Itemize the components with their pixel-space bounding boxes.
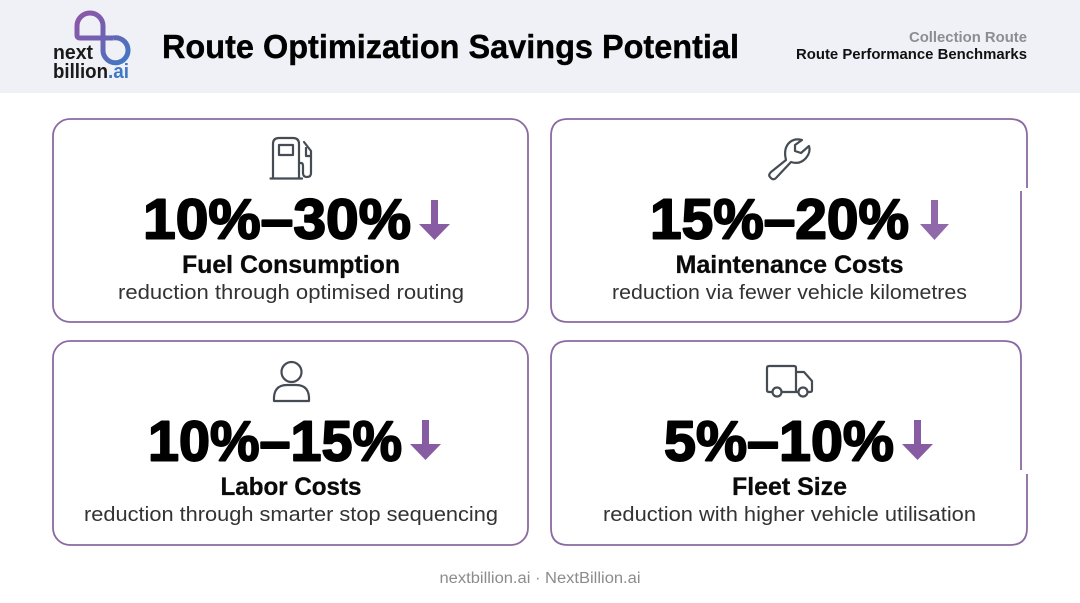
value: 10%–15%: 10%–15%	[148, 410, 402, 474]
value: 10%–30%: 10%–30%	[143, 188, 411, 252]
header band	[0, 0, 1080, 93]
logo: next	[53, 42, 93, 64]
title: Route Optimization Savings Potential	[162, 28, 739, 65]
heading: maintenance costs: Maintenance Costs	[676, 251, 904, 279]
footer: nextbillion.ai · NextBillion.ai	[440, 570, 640, 587]
arrow: down	[902, 420, 933, 460]
arrow: down	[410, 420, 441, 460]
icon: truck	[767, 366, 812, 396]
logo: billion	[53, 61, 108, 83]
icon: fuel pump	[270, 138, 311, 178]
icon: person	[274, 362, 309, 401]
arrow: down	[920, 200, 949, 240]
icon: wrench	[769, 139, 810, 179]
description: reduction with higher vehicle utilisation	[603, 503, 976, 526]
logo	[53, 13, 129, 83]
description: reduction through smarter stop sequencing	[84, 503, 498, 526]
value: 5%–10%: 5%–10%	[664, 410, 894, 474]
logo: .ai	[108, 61, 129, 83]
heading: fleet size: Fleet Size	[732, 473, 847, 501]
panel: fuel consumption	[53, 119, 528, 322]
description: reduction via fewer vehicle kilometres	[612, 281, 967, 304]
panel: maintenance costs	[551, 119, 1027, 322]
arrow: down	[419, 200, 450, 240]
description: reduction through optimised routing	[118, 281, 464, 304]
header subtitle: route performance benchmarks: Route Performance Benchmarks	[796, 47, 1027, 63]
panel: fleet size	[551, 341, 1027, 545]
heading: fuel consumption: Fuel Consumption	[182, 251, 400, 279]
panel: labor costs	[53, 341, 528, 545]
value: 15%–20%: 15%–20%	[650, 188, 909, 252]
header eyebrow: collection route: Collection Route	[909, 30, 1027, 46]
heading: labor costs: Labor Costs	[220, 473, 362, 501]
